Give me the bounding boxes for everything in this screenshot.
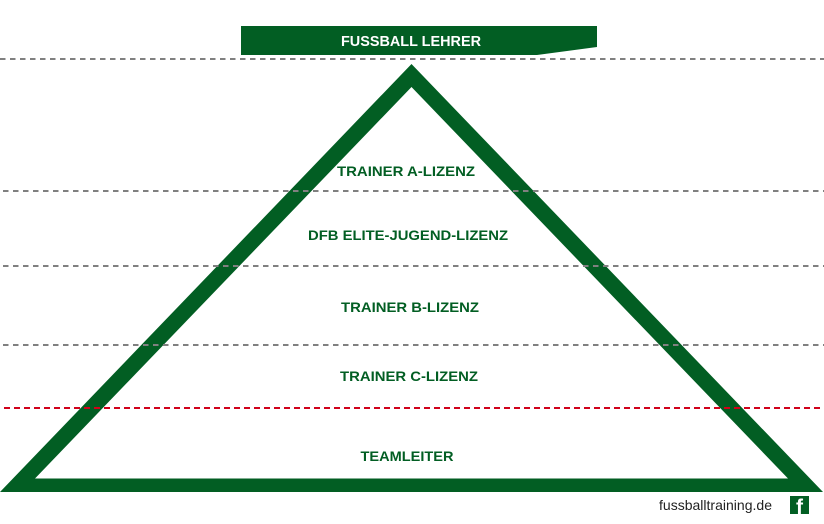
top banner: Fussball Lehrer: FUSSBALL LEHRER (341, 34, 482, 50)
website credit: fussballtraining.de (659, 497, 772, 513)
level label: Trainer C-Lizenz: TRAINER C-LIZENZ (340, 368, 478, 384)
dashed red line (4, 407, 824, 409)
level label: Teamleiter: TEAMLEITER (360, 448, 454, 464)
top banner: Fussball Lehrer (241, 26, 597, 55)
icon: facebook (790, 496, 809, 519)
icon: facebook: f (796, 496, 804, 519)
level label: Trainer B-Lizenz: TRAINER B-LIZENZ (341, 299, 479, 315)
level label: Trainer A-Lizenz: TRAINER A-LIZENZ (337, 163, 475, 179)
level label: DFB Elite-Jugend-Lizenz: DFB ELITE-JUGEND-LIZENZ (308, 227, 508, 243)
